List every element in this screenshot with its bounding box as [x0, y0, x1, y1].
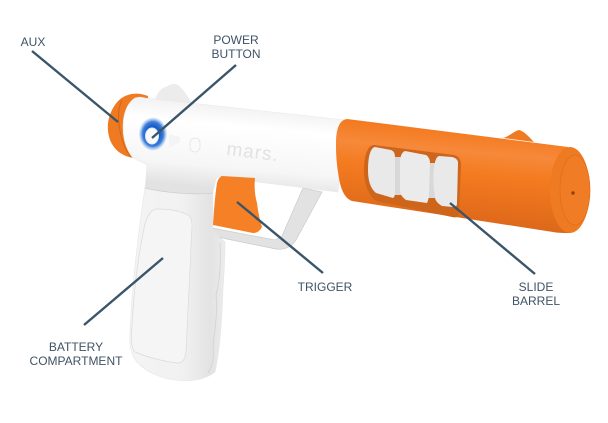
slide pad 2	[400, 151, 430, 203]
trigger	[213, 176, 262, 233]
product: toy gun	[108, 84, 590, 381]
callout line: battery compartment	[84, 258, 163, 325]
slide connector left	[393, 157, 403, 195]
battery compartment	[131, 209, 192, 363]
callout line: aux	[32, 51, 118, 122]
power button	[146, 128, 158, 144]
grip side seam	[208, 243, 220, 373]
orange barrel	[336, 119, 570, 233]
label: power button: BUTTON	[211, 47, 261, 61]
label: aux: AUX	[21, 35, 45, 49]
slide connector right	[428, 163, 438, 198]
neck seam	[145, 188, 213, 194]
muzzle hole	[571, 191, 575, 195]
rear orange cap	[108, 94, 150, 158]
label: power button: POWER	[213, 33, 259, 47]
label: slide barrel: SLIDE	[519, 280, 553, 294]
trigger guard	[212, 188, 322, 249]
button side recess	[169, 134, 180, 148]
callout line: power button	[152, 65, 236, 138]
label: battery compartment: COMPARTMENT	[30, 354, 123, 368]
label: trigger: TRIGGER	[298, 280, 353, 294]
callout line: trigger	[237, 202, 323, 273]
muzzle inner ring	[560, 155, 590, 225]
grip	[130, 187, 225, 381]
callout line: slide barrel	[450, 203, 535, 274]
white body	[123, 97, 345, 194]
barrel muzzle	[550, 147, 590, 233]
rear sight bump	[155, 84, 192, 104]
barrel sight fin	[503, 130, 534, 142]
slide recess	[364, 145, 461, 217]
slide pad 1	[368, 147, 395, 198]
power button ring	[139, 118, 167, 150]
slide pad 3	[433, 156, 458, 207]
cap groove	[118, 100, 131, 157]
embossed logo: mars.	[225, 139, 280, 166]
indicator slot	[190, 138, 200, 152]
label: battery compartment: BATTERY	[49, 340, 103, 354]
label: slide barrel: BARREL	[512, 294, 560, 308]
